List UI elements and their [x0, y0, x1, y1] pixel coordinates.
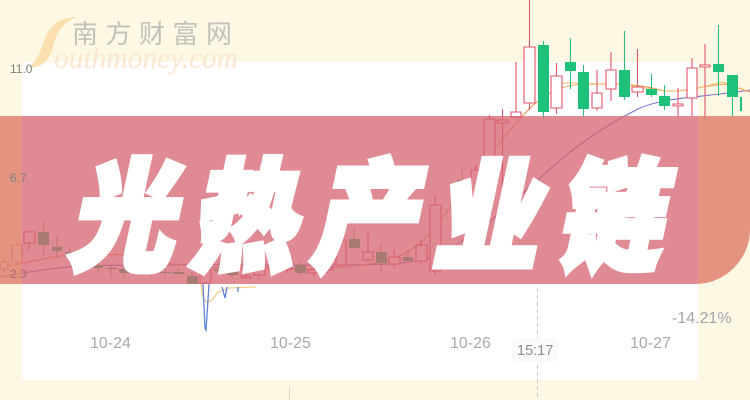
title: 业	[426, 153, 559, 286]
candle wicks: falling	[44, 170, 462, 284]
panel: white chart area	[22, 62, 698, 380]
title	[62, 153, 682, 286]
title: 光	[62, 153, 195, 286]
date axis labels: 10-25	[270, 335, 311, 352]
price axis labels	[10, 62, 33, 281]
price axis labels: 11.0	[10, 62, 33, 76]
band tint: left margin	[0, 116, 22, 284]
band: pink title banner	[0, 116, 750, 284]
date axis labels: 10-24	[90, 335, 131, 352]
percent change label: -14.21%	[672, 310, 732, 327]
watermark URL: outhmoney.com	[54, 40, 238, 75]
date axis labels	[90, 335, 671, 352]
intraday spike below band	[201, 284, 256, 330]
tick line	[288, 387, 290, 400]
watermark Chinese name: 南方财富网	[72, 19, 240, 49]
title: 链	[549, 153, 682, 286]
title: 热	[183, 153, 316, 286]
date axis labels: 10-27	[630, 335, 671, 352]
crosshair time tag	[512, 338, 558, 362]
candle wicks: rising	[4, 0, 705, 284]
price axis labels: 2.3	[10, 267, 27, 281]
crosshair time tag: 15:17	[517, 343, 553, 359]
price axis labels: 6.7	[10, 171, 27, 185]
crosshair dashed line	[536, 288, 538, 400]
candle bodies: falling	[38, 45, 742, 284]
icon: stylised S swoosh	[28, 17, 76, 68]
band tint: right margin	[698, 116, 750, 284]
candle bodies: rising	[0, 47, 710, 283]
title: 产	[304, 153, 437, 286]
date axis labels: 10-26	[450, 335, 491, 352]
watermark logo	[28, 17, 240, 75]
moving average lines	[0, 82, 750, 277]
candlestick chart	[0, 0, 750, 284]
